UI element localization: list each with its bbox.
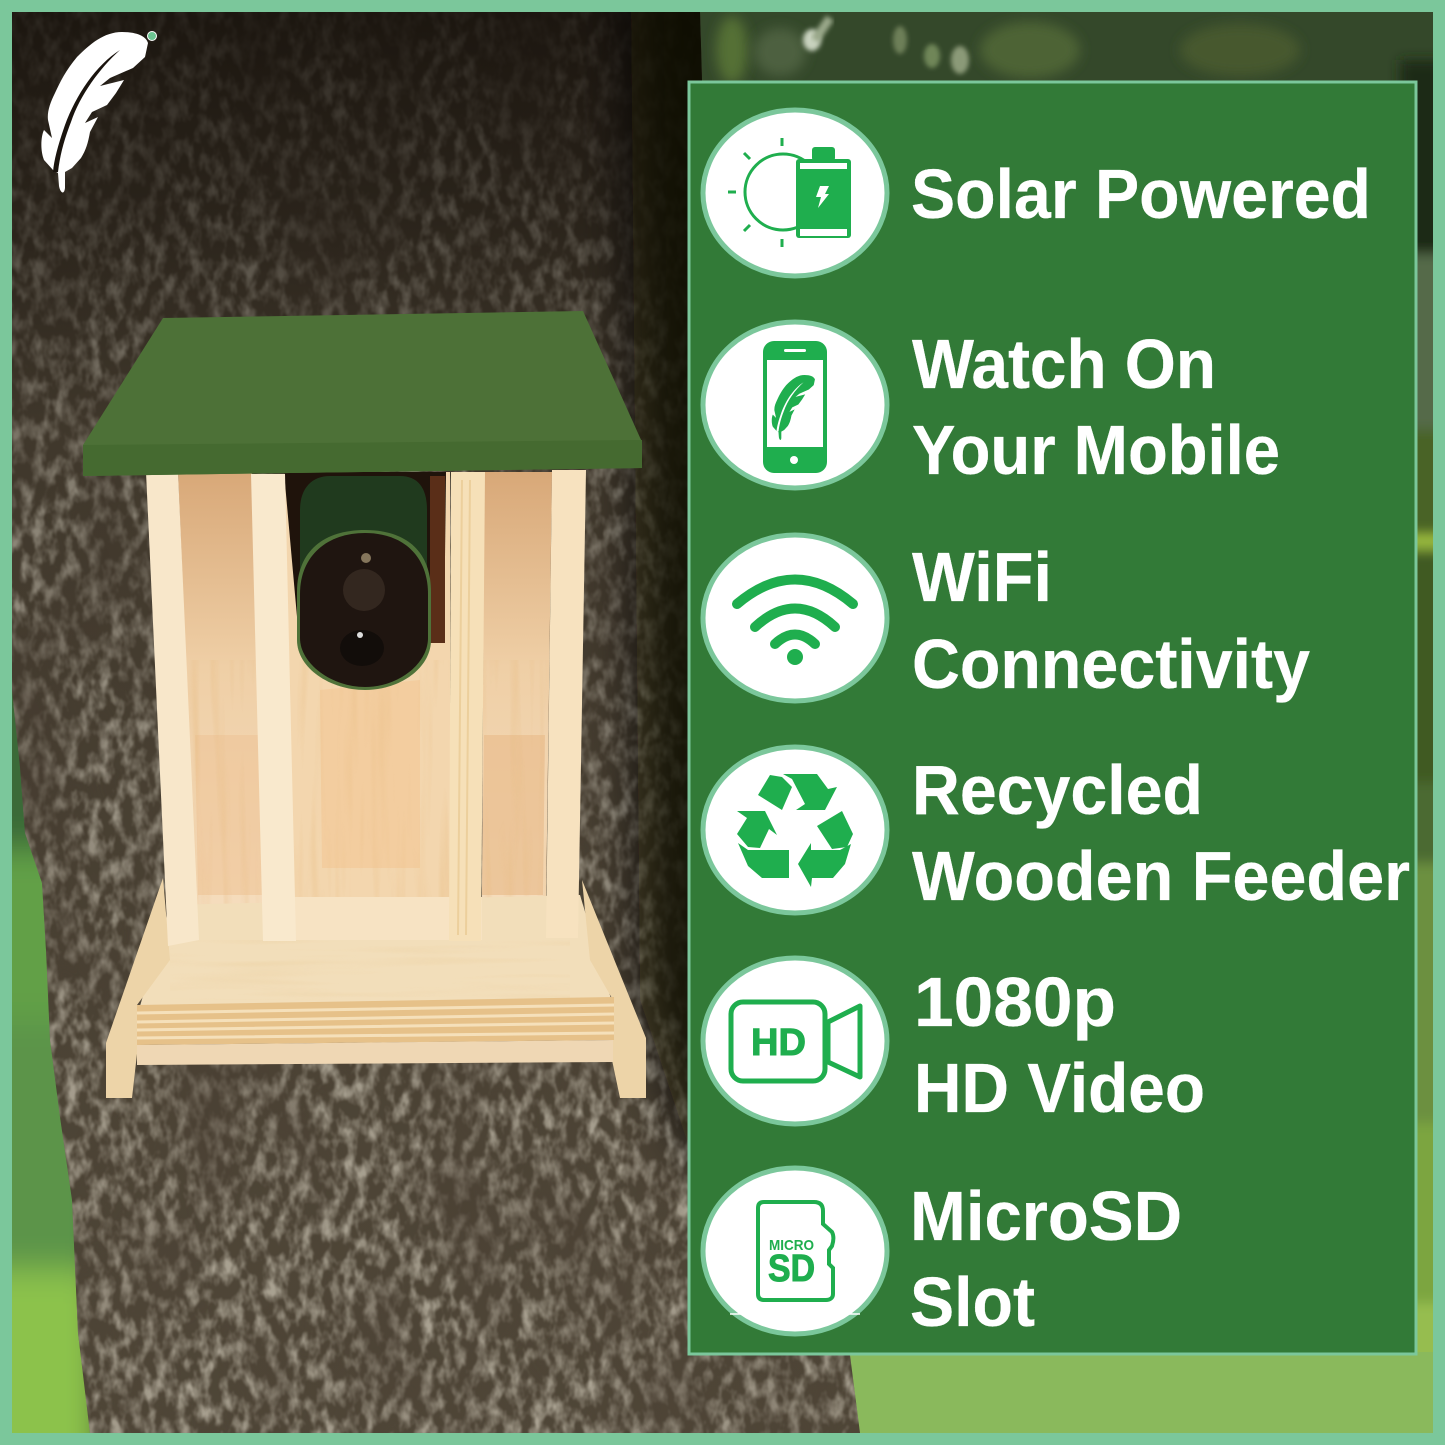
icon: microSD card bbox=[758, 1202, 834, 1300]
icon: phone bbox=[763, 341, 827, 473]
text: Recycled Wooden Feeder: Recycled bbox=[912, 751, 1203, 829]
text: Recycled Wooden Feeder: Wooden Feeder bbox=[912, 837, 1410, 915]
text: Solar Powered: Solar Powered bbox=[911, 155, 1371, 233]
text: MicroSD Slot bbox=[910, 1177, 1182, 1341]
text: Watch On Your Mobile: Your Mobile bbox=[912, 411, 1280, 489]
tree trunk bbox=[0, 0, 900, 1445]
text: 1080p HD Video: HD Video bbox=[914, 1049, 1205, 1127]
text: 1080p HD Video: 1080p bbox=[914, 963, 1116, 1041]
feature: 1080p HD Video bbox=[703, 958, 1205, 1127]
text: MicroSD Slot: MicroSD bbox=[910, 1177, 1182, 1255]
feeder lower frame bbox=[262, 897, 482, 940]
icon: HD camera: HD bbox=[751, 1022, 806, 1064]
icon: recycle bbox=[737, 774, 853, 887]
icon: sun and battery bbox=[728, 138, 851, 247]
bird feeder bbox=[83, 311, 646, 1098]
text: WiFi Connectivity: Connectivity bbox=[912, 625, 1310, 703]
feeder inner back panels bbox=[178, 472, 552, 905]
text: 1080p HD Video bbox=[914, 963, 1205, 1127]
feeder tray front board bbox=[137, 997, 614, 1065]
text: Watch On Your Mobile bbox=[912, 325, 1280, 489]
text: Watch On Your Mobile: Watch On bbox=[912, 325, 1216, 403]
icon: HD camera bbox=[731, 1002, 860, 1081]
feature: WiFi Connectivity bbox=[703, 535, 1310, 703]
panel: features bbox=[689, 82, 1416, 1354]
text: WiFi Connectivity: WiFi bbox=[912, 538, 1052, 616]
feeder camera bbox=[297, 476, 431, 690]
feature: Recycled Wooden Feeder bbox=[703, 747, 1410, 915]
icon: microSD card: SD bbox=[768, 1248, 815, 1290]
feeder roof bbox=[83, 311, 642, 476]
feeder posts bbox=[146, 470, 586, 946]
icon: microSD card: MICRO bbox=[769, 1237, 814, 1254]
feature: Watch On Your Mobile bbox=[703, 322, 1280, 489]
feeder tray floor bbox=[140, 895, 612, 1006]
feeder tray left rail bbox=[106, 878, 170, 1098]
feature: Solar Powered bbox=[703, 110, 1371, 276]
icon: wifi bbox=[737, 580, 853, 665]
text: MicroSD Slot: Slot bbox=[910, 1263, 1035, 1341]
text: WiFi Connectivity bbox=[912, 538, 1310, 703]
feeder tray right rail bbox=[582, 880, 646, 1098]
feature: MicroSD Slot bbox=[703, 1168, 1182, 1341]
logo: feather bbox=[41, 32, 156, 192]
text: Recycled Wooden Feeder bbox=[912, 751, 1410, 915]
